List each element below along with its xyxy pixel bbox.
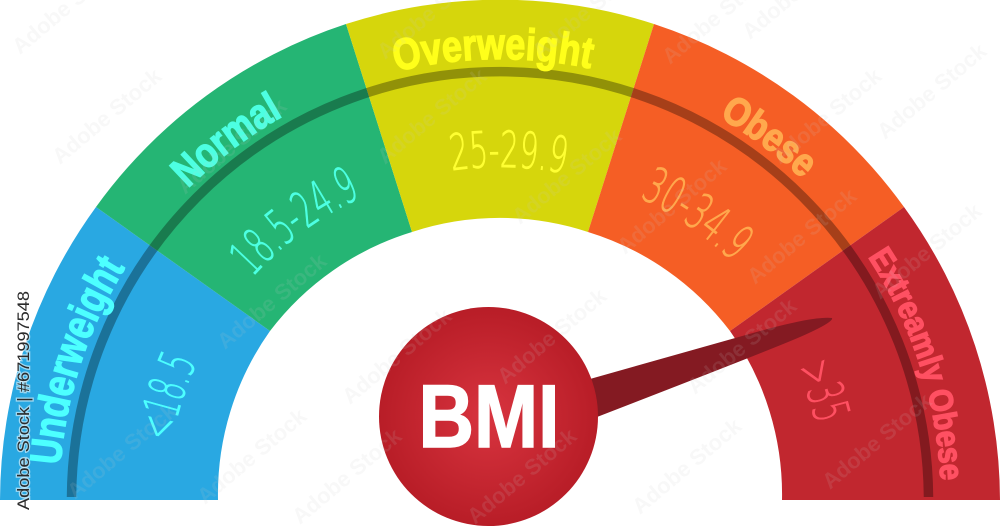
watermarks: Adobe Stock xyxy=(682,293,802,399)
segment: normal xyxy=(96,24,412,331)
watermarks: Adobe Stock xyxy=(372,63,492,169)
watermarks: Adobe Stock xyxy=(492,283,612,389)
watermarks: Adobe Stock xyxy=(47,63,167,169)
stock id credit: Adobe Stock | #671997548 xyxy=(14,291,33,510)
label: Underweight: Underweight xyxy=(30,255,126,463)
range: over 35: >35 xyxy=(800,360,850,420)
watermarks: Adobe Stock xyxy=(507,123,627,229)
watermarks: Adobe Stock xyxy=(872,38,992,144)
dark inner arc line xyxy=(72,72,928,500)
watermarks: Adobe Stock xyxy=(742,183,862,289)
BMI hub xyxy=(379,307,598,526)
BMI ranges xyxy=(144,130,850,436)
label: Obese: Obese xyxy=(724,98,814,176)
range: 25-29.9: 25-29.9 xyxy=(450,130,566,173)
range: under 18.5: <18.5 xyxy=(144,351,194,436)
label: Extremely Obese: Extreamly Obese xyxy=(868,246,958,480)
watermarks: Adobe Stock xyxy=(767,63,887,169)
watermarks: Adobe Stock xyxy=(627,413,747,519)
range: 18.5-24.9: 18.5-24.9 xyxy=(230,167,356,275)
label: Normal: Normal xyxy=(168,90,282,188)
watermarks: Adobe Stock xyxy=(867,198,987,304)
watermarks: Adobe Stock xyxy=(212,248,332,354)
label: Overweight: Overweight xyxy=(393,27,595,72)
watermarks: Adobe Stock xyxy=(62,398,182,504)
segment: obese xyxy=(588,24,904,331)
gauge needle xyxy=(590,318,832,417)
hub circle xyxy=(379,307,598,526)
watermarks: Adobe Stock xyxy=(462,423,582,526)
watermarks: Adobe Stock xyxy=(612,153,732,259)
watermarks: Adobe Stock xyxy=(287,423,407,526)
segment: underweight xyxy=(0,207,270,500)
watermarks: Adobe Stock xyxy=(817,388,937,494)
segment: overweight xyxy=(346,0,654,232)
hub text: BMI xyxy=(418,366,560,466)
watermarks: Adobe Stock xyxy=(192,403,312,509)
watermarks: Adobe Stock xyxy=(172,93,292,199)
watermarks: Adobe Stock xyxy=(337,303,457,409)
range: 30-34.9: 30-34.9 xyxy=(642,167,753,257)
segment: extremely obese xyxy=(730,207,1000,500)
